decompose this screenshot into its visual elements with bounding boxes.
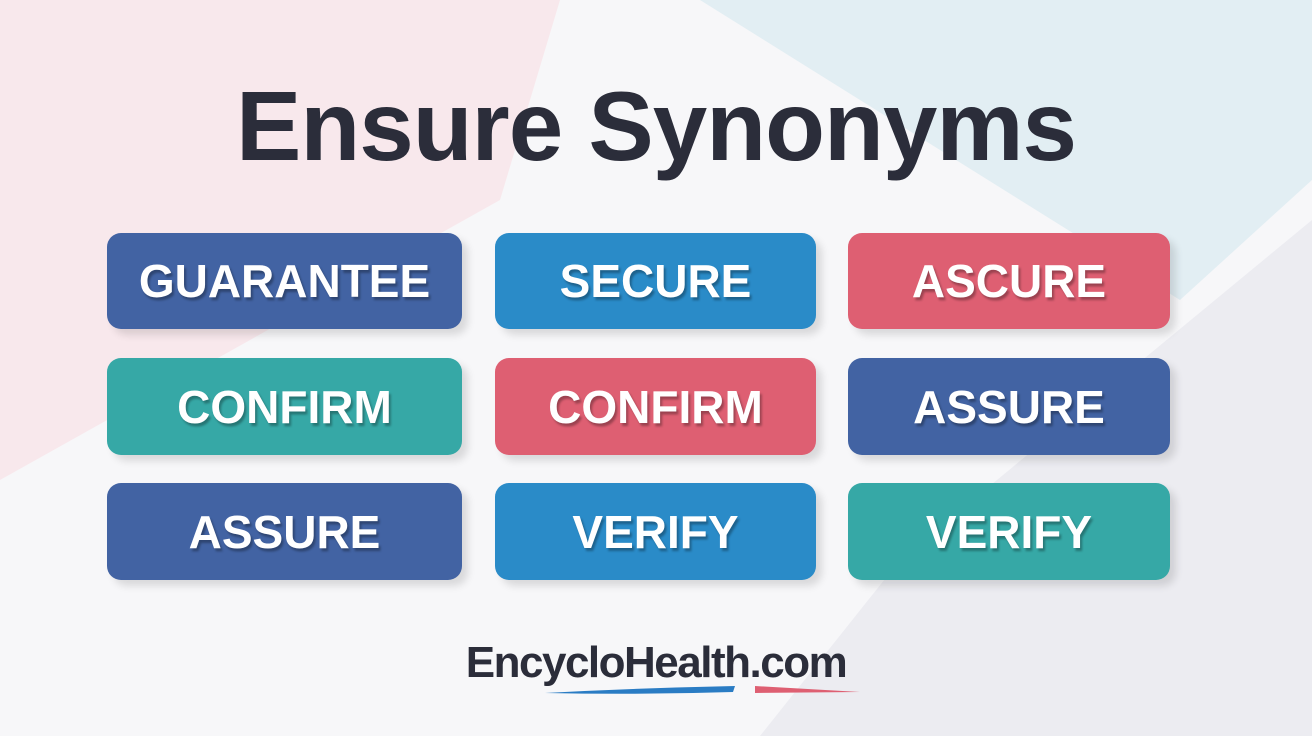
box: CONFIRM teal: CONFIRM xyxy=(177,380,392,432)
box: ASCURE: ASCURE xyxy=(912,255,1106,307)
box: CONFIRM teal xyxy=(107,358,462,455)
box: ASSURE: ASSURE xyxy=(913,380,1105,432)
box: VERIFY teal xyxy=(848,483,1170,580)
box: VERIFY teal: VERIFY xyxy=(926,506,1092,558)
box: VERIFY: VERIFY xyxy=(572,506,739,558)
box: ASSURE xyxy=(848,358,1170,455)
box: GUARANTEE xyxy=(107,233,462,329)
box: GUARANTEE: GUARANTEE xyxy=(139,255,430,307)
box: ASSURE 2 xyxy=(107,483,462,580)
box: ASCURE xyxy=(848,233,1170,329)
box: CONFIRM red xyxy=(495,358,816,455)
box: SECURE: SECURE xyxy=(560,255,751,307)
title: Ensure Synonyms xyxy=(236,71,1076,181)
box: SECURE xyxy=(495,233,816,329)
box: CONFIRM red: CONFIRM xyxy=(548,380,763,432)
footer logo: EncycloHealth.com xyxy=(466,638,846,687)
box: ASSURE 2: ASSURE xyxy=(189,506,380,558)
box: VERIFY xyxy=(495,483,816,580)
